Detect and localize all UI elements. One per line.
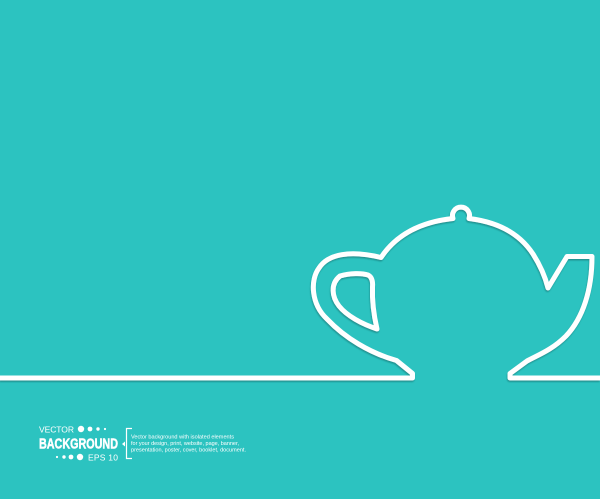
icon: teapot outline with baseline (0, 207, 600, 378)
description text: presentation, poster, cover, booklet, document. (131, 448, 246, 454)
description text (131, 434, 246, 454)
teapot handle opening (333, 274, 377, 329)
text: EPS 10: EPS 10 (88, 452, 118, 462)
description text: for your design, print, website, page, banner, (131, 441, 239, 447)
baseline, teapot body and lid knob (0, 207, 600, 378)
text: BACKGROUND: BACKGROUND (39, 436, 118, 452)
dots row top (78, 426, 106, 432)
bracket pointer (122, 442, 125, 446)
dots row bottom (56, 454, 83, 460)
description text: Vector background with isolated elements (131, 434, 234, 440)
logo block (39, 424, 246, 462)
text: VECTOR: VECTOR (39, 424, 74, 434)
bracket (126, 428, 132, 458)
